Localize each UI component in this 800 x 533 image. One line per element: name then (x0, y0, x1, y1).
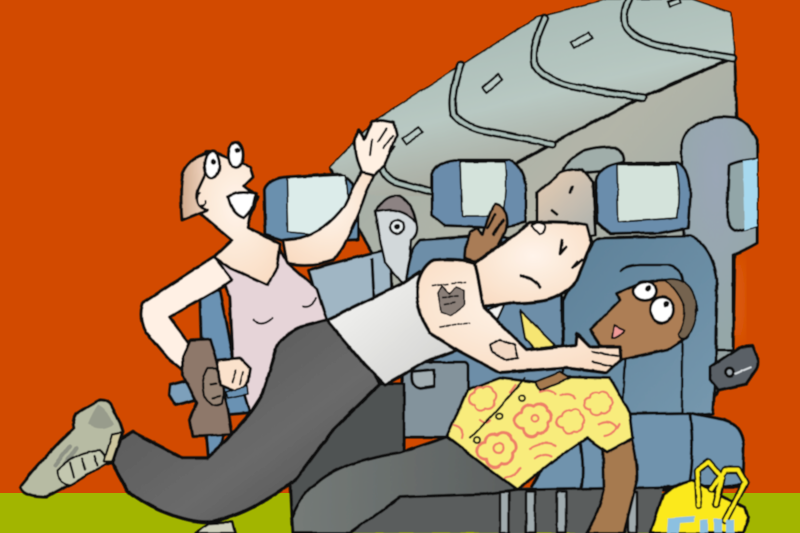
bin doors face (331, 0, 734, 196)
person: bald passenger behind, back of head (537, 169, 596, 240)
glasses eyes (204, 152, 220, 178)
open mouth (228, 193, 256, 218)
forearm hanging down (586, 432, 637, 533)
person: man in yellow shirt being choked (292, 279, 697, 533)
shirt buttons (519, 395, 525, 401)
open mouth (612, 325, 624, 338)
seat: left row headrest (264, 174, 358, 243)
bin door outlines (382, 0, 733, 192)
raised hand (355, 120, 397, 175)
bag handles (697, 462, 745, 520)
armrest: right seat (710, 346, 758, 390)
seat: left row back (308, 250, 392, 330)
chest and neck (535, 372, 570, 390)
shirt flower pattern (455, 385, 620, 478)
patterned shirt (447, 377, 633, 490)
person: bald man in white tank top (327, 222, 621, 385)
rear seat on the right with window (563, 117, 757, 350)
seat: right row headrest (596, 163, 690, 234)
seat: cushions (530, 413, 744, 490)
ear (532, 223, 545, 234)
ear (197, 193, 205, 206)
bin door handles (402, 0, 681, 144)
hair (665, 279, 696, 339)
seat: middle row back (402, 236, 565, 437)
left arm (141, 257, 232, 373)
blue seat side behind him (200, 290, 250, 460)
tattoo on shoulder (432, 282, 470, 327)
fingers (592, 352, 618, 366)
clothing: dark gray trousers behind (290, 384, 404, 525)
seat: middle row headrest (432, 160, 526, 228)
head (590, 280, 697, 360)
trousers of man in shirt (292, 437, 517, 533)
bag: yellow shopping bag (650, 462, 748, 533)
panel: overhead bins and cabin wall (331, 0, 737, 420)
white foot under trousers (195, 522, 235, 533)
background: green floor band (0, 493, 800, 533)
yellow collar (520, 310, 555, 355)
shirt placket (470, 378, 525, 438)
bag logo letters (667, 516, 734, 533)
holding hand (217, 358, 250, 392)
angry brows and eye (521, 240, 582, 287)
person: gray passenger in glasses behind (376, 196, 417, 290)
tank strap at neck (483, 303, 505, 325)
tattoo on forearm (490, 340, 518, 360)
bin lower edge line (518, 57, 734, 162)
head and neck (475, 222, 592, 307)
torso tank top (214, 243, 327, 413)
rear seat upper contour (563, 147, 624, 175)
hand: back passenger raised brown hand (465, 204, 507, 262)
hair (181, 152, 213, 220)
seat: right row back (563, 236, 717, 420)
blue armrest knob (169, 380, 195, 405)
shoe: sneaker on the raised foot (20, 400, 123, 497)
seat: legs and frame under the seats (300, 486, 740, 533)
eyes (633, 282, 657, 300)
raised right arm (283, 170, 374, 265)
arm and hand choking (417, 259, 621, 373)
orange glow smear beside cabin (731, 255, 745, 345)
person: thin man in pink tank top (141, 120, 397, 533)
head and neck (192, 152, 280, 285)
window (727, 159, 757, 231)
clothing: bald man's dark trousers (112, 320, 380, 522)
object: brown seat belt strap and buckle (183, 339, 250, 436)
white tank top (327, 272, 457, 385)
